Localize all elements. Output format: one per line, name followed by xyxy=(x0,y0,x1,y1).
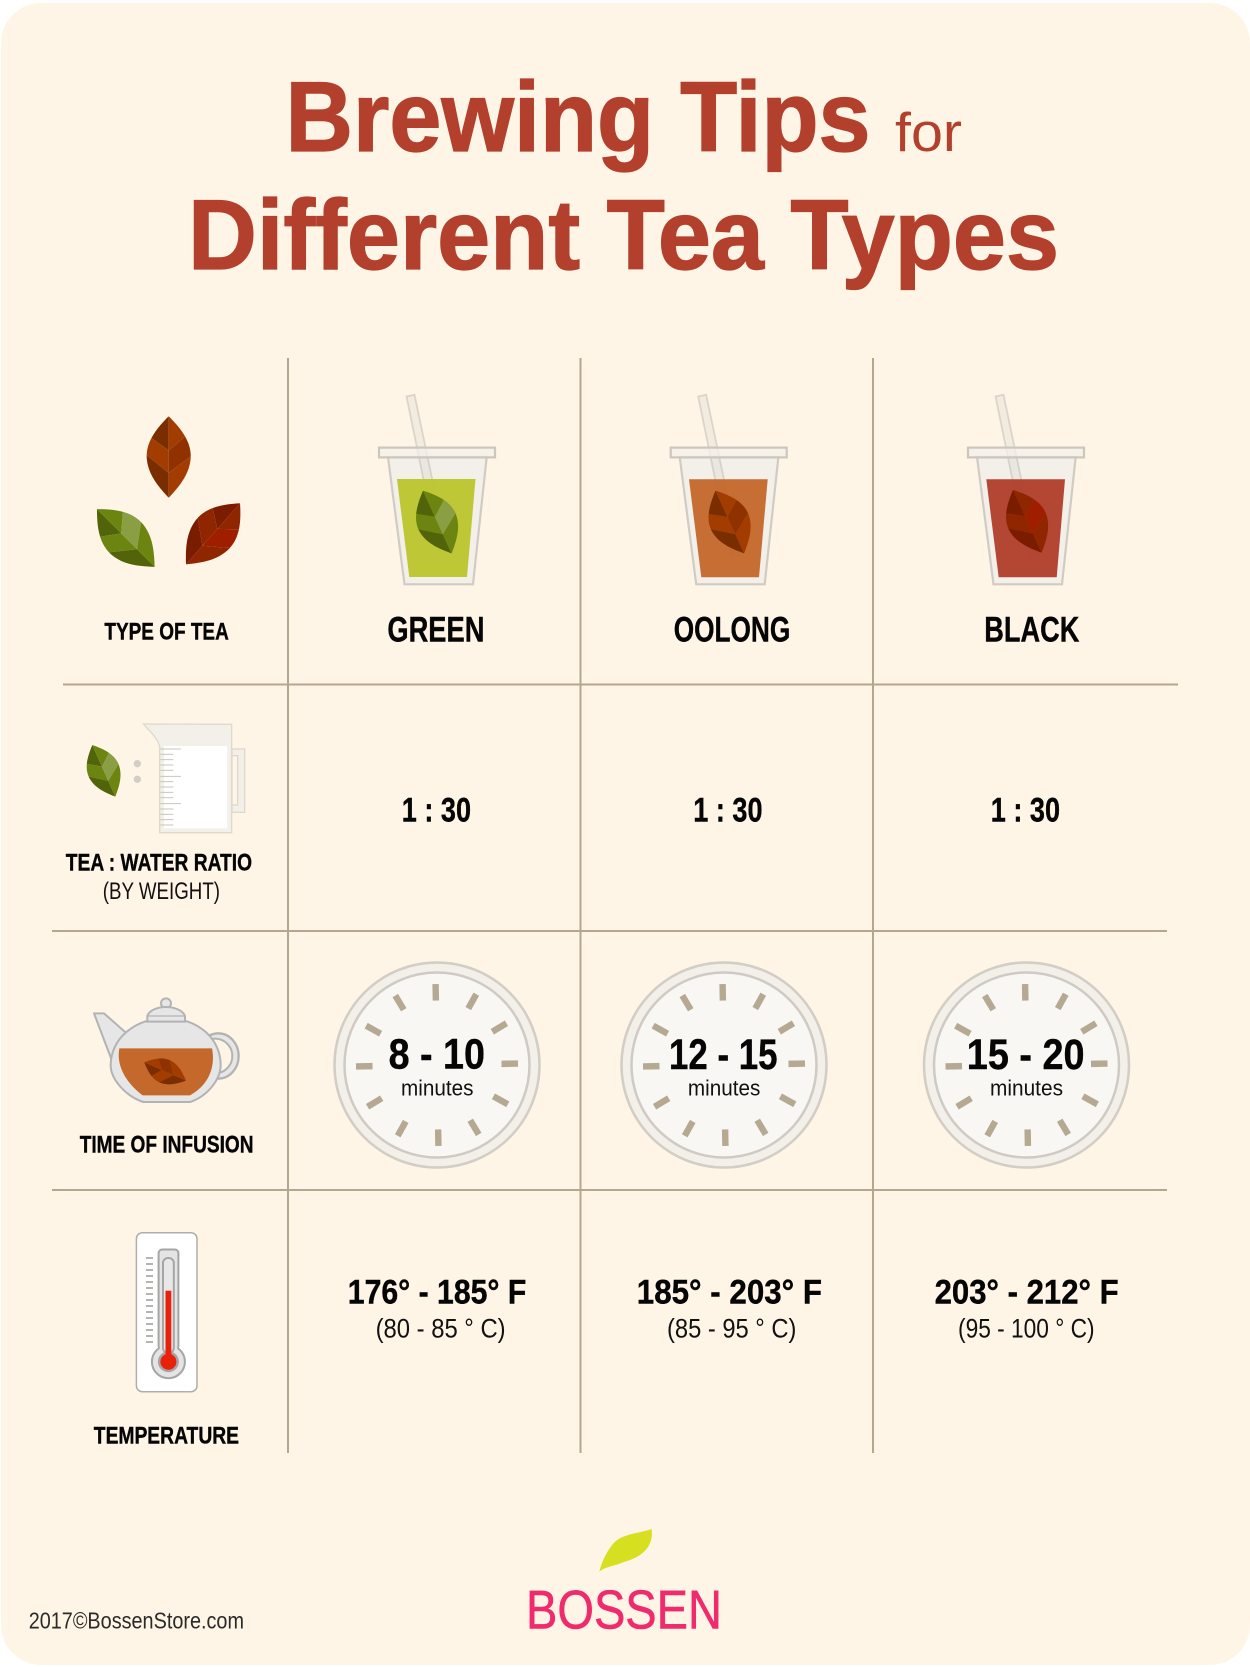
icon: green tea cup xyxy=(379,395,495,584)
value: green temperature: 176° - 185° F xyxy=(348,1273,526,1311)
value: oolong temperature: 185° - 203° F xyxy=(637,1273,822,1311)
clock: black 15-20 minutes: 15 - 20 xyxy=(967,1031,1085,1079)
copyright: 2017©BossenStore.com xyxy=(29,1607,244,1633)
label: black: BLACK xyxy=(984,611,1079,650)
value: black temperature: (95 - 100 ° C) xyxy=(958,1313,1095,1343)
icon: three tea leaves xyxy=(71,412,267,593)
clock: black 15-20 minutes: minutes xyxy=(990,1076,1063,1101)
label: type of tea: TYPE OF TEA xyxy=(104,618,229,645)
icon: thermometer xyxy=(136,1233,197,1392)
row: type of tea xyxy=(71,395,1084,650)
logo: Bossen xyxy=(526,1529,722,1640)
icon: logo leaf xyxy=(599,1529,652,1572)
clock: oolong 12-15 minutes xyxy=(622,962,826,1168)
title xyxy=(188,61,1059,290)
title: for xyxy=(895,101,962,163)
label: tea water ratio: (BY WEIGHT) xyxy=(103,878,220,905)
logo wordmark: BOSSEN xyxy=(526,1578,722,1640)
icon: black tea cup xyxy=(968,395,1084,584)
value: green temperature: (80 - 85 ° C) xyxy=(376,1313,506,1343)
value: oolong temperature xyxy=(637,1273,822,1343)
label: time of infusion: TIME OF INFUSION xyxy=(80,1131,254,1158)
clock: green 8-10 minutes: minutes xyxy=(401,1076,474,1101)
value: black ratio: 1 : 30 xyxy=(991,791,1060,829)
label: tea water ratio: TEA : WATER RATIO xyxy=(66,850,252,877)
row: temperature xyxy=(94,1233,1119,1449)
label: green: GREEN xyxy=(387,611,484,650)
value: green ratio: 1 : 30 xyxy=(402,791,471,829)
title: Brewing Tips xyxy=(286,61,870,172)
label: tea water ratio xyxy=(66,850,252,905)
value: black temperature: 203° - 212° F xyxy=(935,1273,1119,1311)
title: Different Tea Types xyxy=(188,179,1059,290)
value: green temperature xyxy=(348,1273,526,1343)
label: temperature: TEMPERATURE xyxy=(94,1422,239,1449)
value: oolong temperature: (85 - 95 ° C) xyxy=(667,1313,796,1343)
icon: oolong tea cup xyxy=(671,395,787,584)
row: tea water ratio xyxy=(66,724,1060,905)
value: oolong ratio: 1 : 30 xyxy=(693,791,762,829)
clock: oolong 12-15 minutes: minutes xyxy=(688,1076,760,1101)
label: oolong: OOLONG xyxy=(674,611,790,650)
clock: green 8-10 minutes xyxy=(334,962,540,1168)
clock: oolong 12-15 minutes: 12 - 15 xyxy=(669,1031,778,1079)
table grid lines xyxy=(52,358,1178,1453)
clock: black 15-20 minutes xyxy=(924,962,1129,1168)
row: time of infusion xyxy=(80,962,1129,1168)
icon: leaf and measuring jug xyxy=(69,724,245,833)
clock: green 8-10 minutes: 8 - 10 xyxy=(389,1030,485,1078)
value: black temperature xyxy=(935,1273,1119,1343)
icon: teapot xyxy=(94,998,239,1102)
